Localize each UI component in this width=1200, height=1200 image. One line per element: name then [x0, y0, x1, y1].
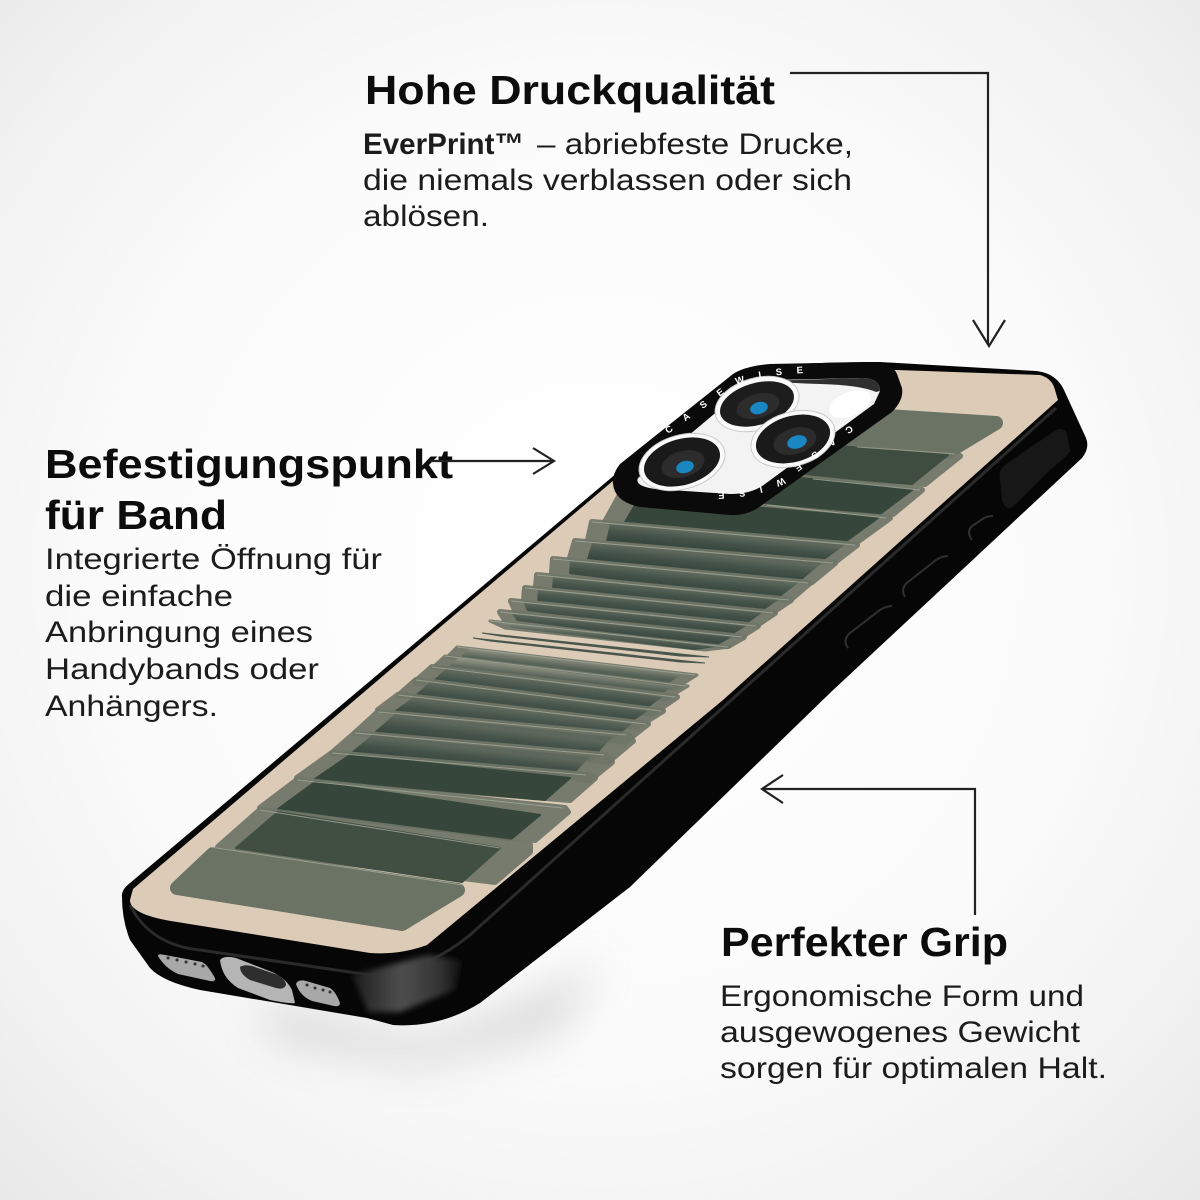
- body text: [363, 128, 853, 233]
- body text: die einfache: [45, 580, 233, 613]
- lens right: [744, 401, 842, 477]
- body text: Anhängers.: [45, 690, 218, 723]
- corner reflection: [352, 955, 462, 1012]
- camera window upper rim: [762, 378, 880, 392]
- heading second line: für Band: [45, 492, 227, 538]
- body text: sorgen für optimalen Halt.: [720, 1052, 1107, 1085]
- camera ring: [613, 362, 902, 515]
- ring lettering bottom: CASEWISE: [718, 426, 852, 499]
- heading: Perfekter Grip: [721, 919, 1008, 965]
- callout: Befestigungspunkt: [45, 441, 453, 723]
- callout: Hohe Druckqualität: [363, 67, 853, 233]
- ring lettering top: CASEWISE: [666, 366, 803, 433]
- lens left: [632, 424, 732, 500]
- arrow: band attachment: [430, 448, 554, 474]
- body text: die niemals verblassen oder sich: [363, 164, 852, 197]
- body text: Integrierte Öffnung für: [45, 543, 382, 576]
- arrow: print quality: [790, 73, 1005, 346]
- lens reflection: [825, 385, 875, 423]
- camera window: [637, 378, 880, 494]
- heading: Hohe Druckqualität: [365, 67, 775, 113]
- body text: [45, 543, 382, 723]
- case edge highlight: [130, 408, 1056, 975]
- back panel: [130, 370, 1058, 953]
- side buttons: [845, 429, 1070, 648]
- speaker grille right: [296, 980, 340, 1006]
- body text: ausgewogenes Gewicht: [720, 1016, 1081, 1049]
- body text: Anbringung eines: [45, 616, 313, 649]
- arrow: grip: [762, 775, 975, 915]
- case body: [122, 362, 1087, 1025]
- body text: Ergonomische Form und: [720, 980, 1084, 1013]
- phone shadow: [250, 960, 600, 1065]
- body text: Handybands oder: [45, 653, 319, 686]
- phone case: [122, 362, 1088, 1026]
- body text: [720, 980, 1107, 1085]
- charging port: [220, 957, 295, 1003]
- print bands: [177, 408, 996, 924]
- body text: EverPrint™: [363, 128, 524, 161]
- body text: ablösen.: [363, 200, 489, 233]
- heading: Befestigungspunkt: [45, 441, 453, 487]
- body text: – abriebfeste Drucke,: [537, 128, 853, 161]
- lens top: [708, 367, 806, 441]
- callout: Perfekter Grip: [720, 919, 1107, 1085]
- speaker grille left: [158, 954, 215, 981]
